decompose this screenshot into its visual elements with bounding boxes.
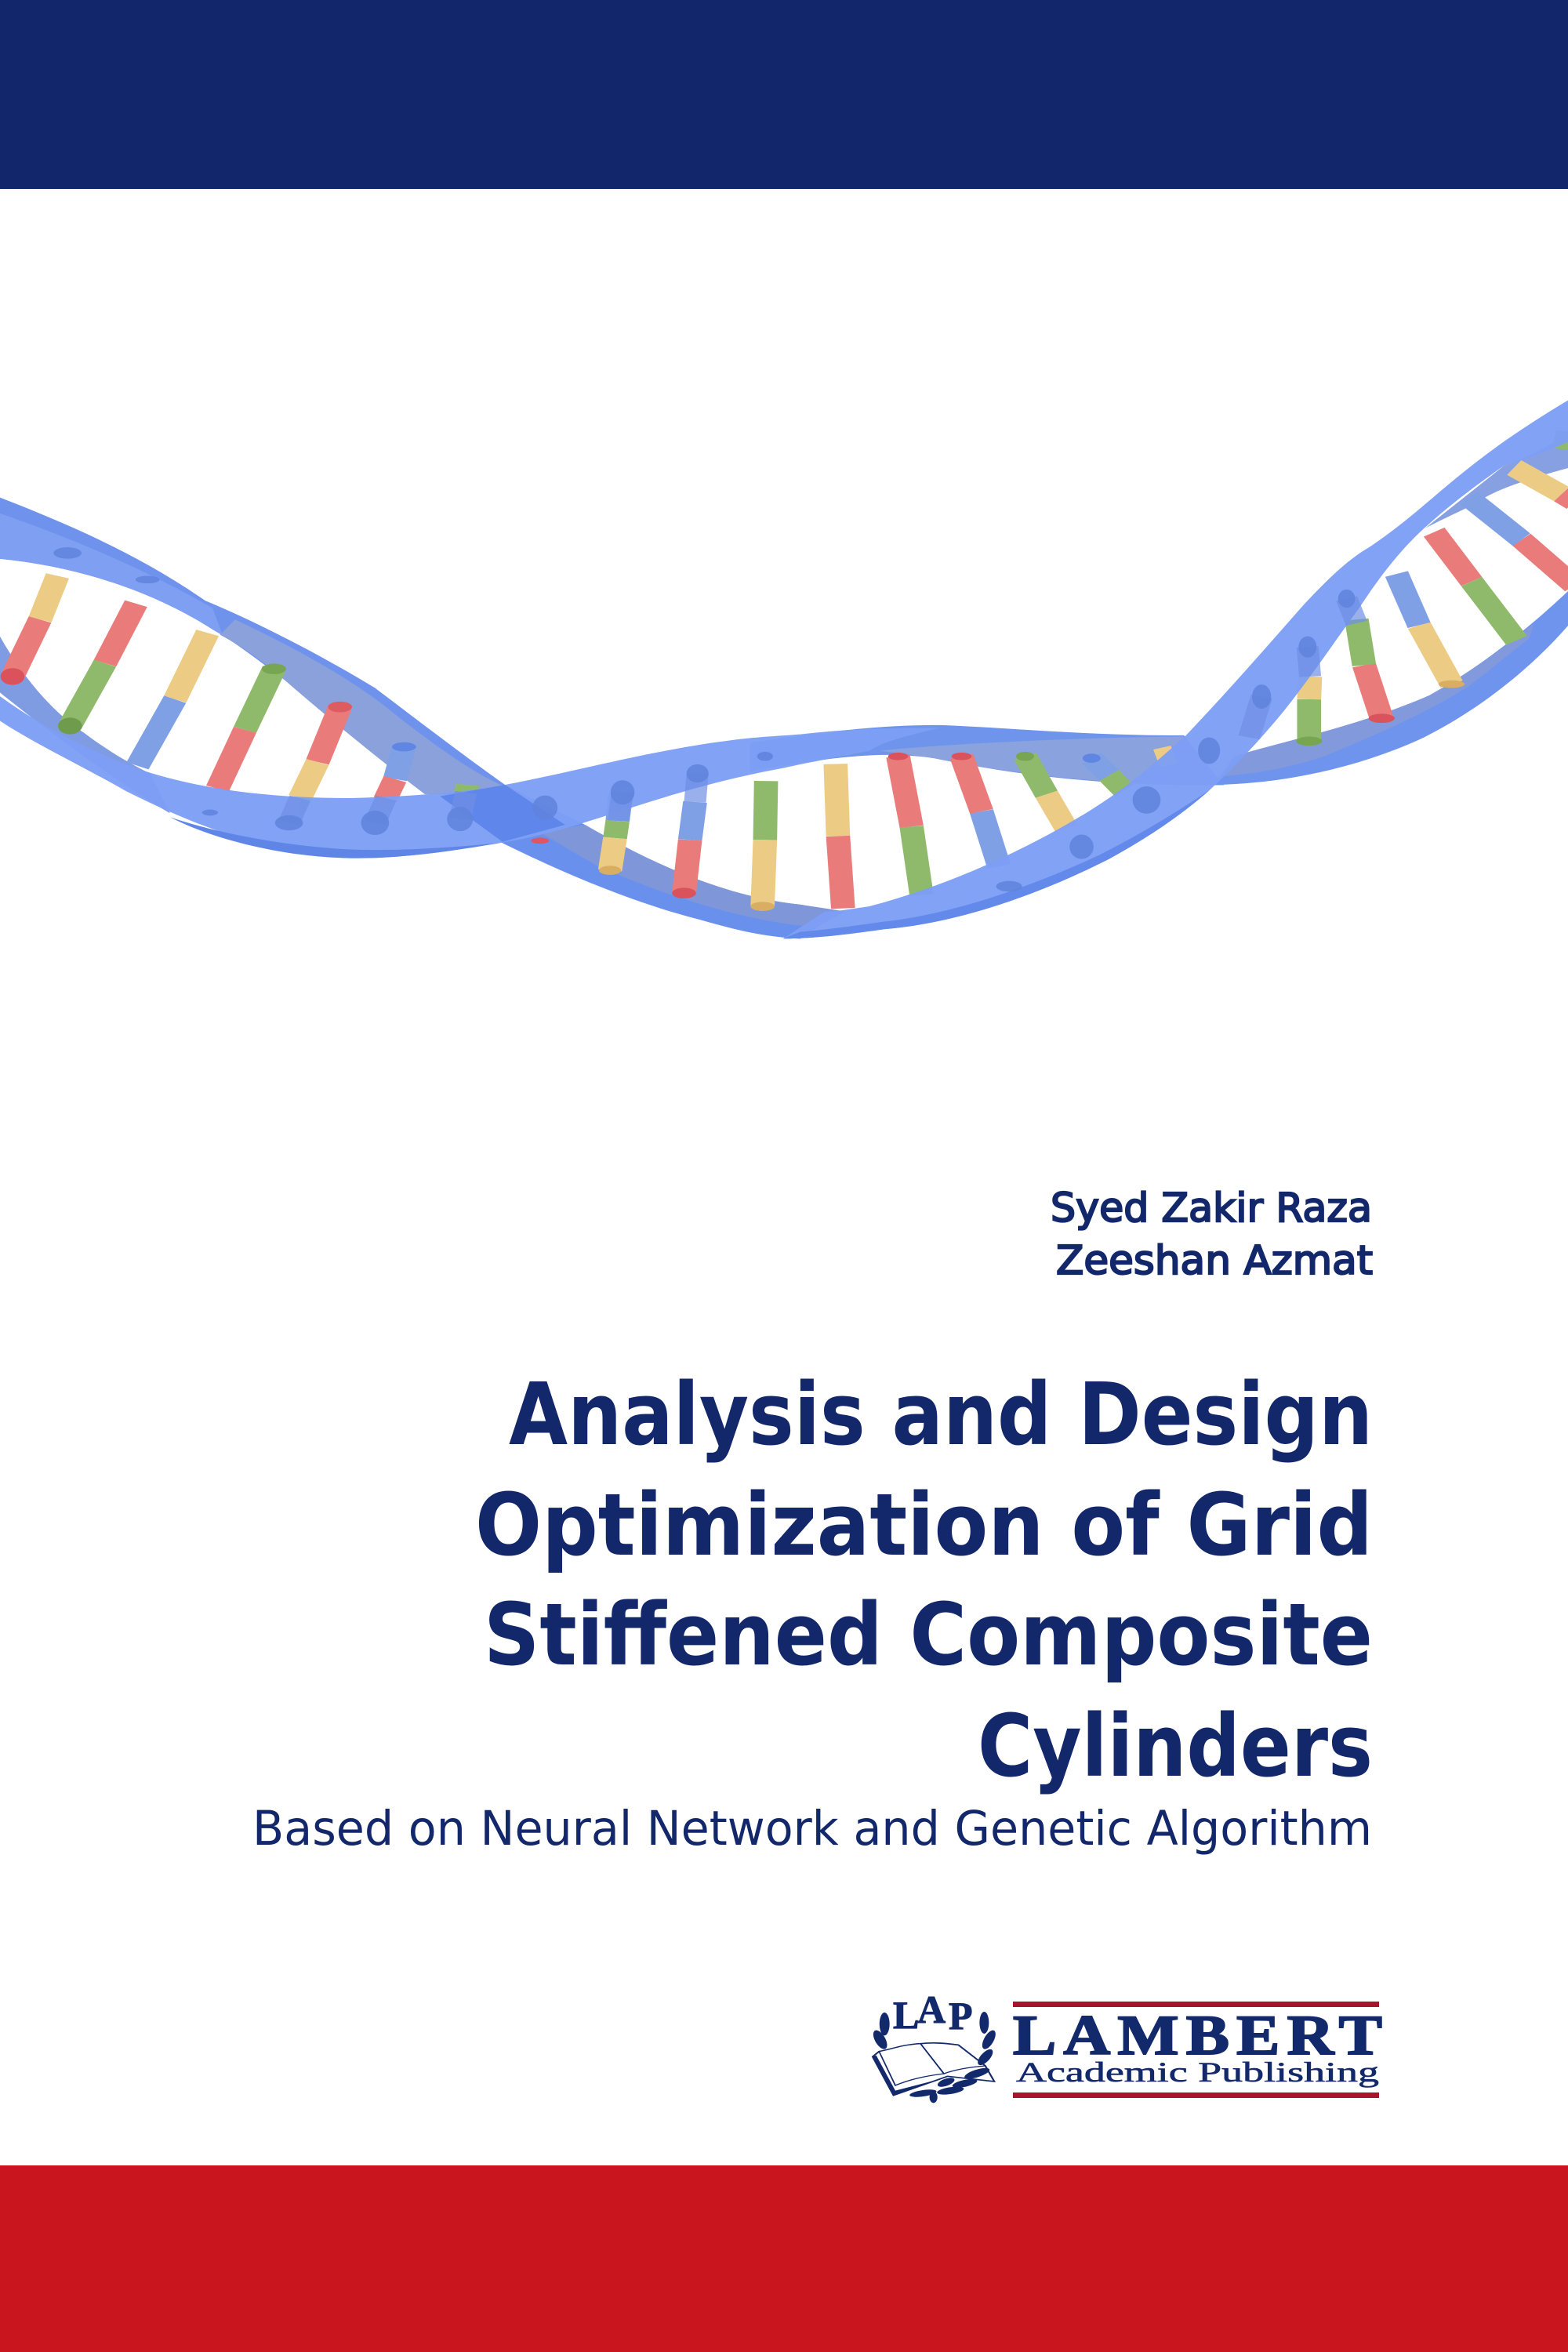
logo wordmark: LAMBERT xyxy=(1013,2004,1389,2067)
title: Cylinders xyxy=(978,1696,1373,1796)
front ribbon, rising right xyxy=(783,399,1568,938)
back ribbon, upper left xyxy=(0,497,505,794)
ribbon darker outer edge xyxy=(783,790,1209,938)
logo wordmark: Academic Publishing xyxy=(1016,2056,1379,2088)
logo emblem: open book and laurel xyxy=(870,2012,998,2103)
logo initials LAP xyxy=(893,1987,973,2038)
rung end caps xyxy=(1,663,1465,911)
authors xyxy=(1051,1185,1373,1284)
tubes seen through the ribbon xyxy=(289,599,1356,823)
lit part of upper left ribbon xyxy=(0,513,223,635)
back ribbon, lower right xyxy=(1214,589,1568,785)
lower right inner face xyxy=(1224,623,1534,776)
centre right inner face xyxy=(880,736,1224,786)
ribbon darker lower edge xyxy=(170,817,500,858)
lower centre inner face xyxy=(540,825,845,929)
logo red rules xyxy=(1013,2002,1379,2098)
publisher logo xyxy=(870,1987,1389,2103)
back ribbon, centre right xyxy=(750,725,1220,785)
authors: Zeeshan Azmat xyxy=(1056,1238,1373,1284)
logo initials LAP: A xyxy=(917,1987,946,2031)
title: Optimization of Grid xyxy=(475,1475,1373,1575)
logo initials LAP: P xyxy=(949,1994,973,2038)
rung holes xyxy=(53,547,1355,891)
top right inner face xyxy=(1425,434,1568,528)
authors: Syed Zakir Raza xyxy=(1051,1185,1372,1232)
crossing overlap xyxy=(440,785,565,842)
lower left ribbon inner face xyxy=(0,635,170,813)
subtitle: Based on Neural Network and Genetic Algorithm xyxy=(252,1801,1372,1857)
base pair rungs xyxy=(13,439,1568,909)
illustration: DNA double helix xyxy=(0,399,1568,938)
title: Analysis and Design xyxy=(509,1364,1373,1465)
front ribbon, centre xyxy=(0,695,940,858)
back ribbon, lower centre xyxy=(500,785,840,938)
title: Stiffened Composite xyxy=(484,1584,1373,1685)
top navy band xyxy=(0,0,1568,189)
bottom red band xyxy=(0,2165,1568,2352)
title xyxy=(475,1364,1373,1796)
back ribbon inner face xyxy=(220,619,505,794)
logo initials LAP: L xyxy=(893,1993,919,2037)
